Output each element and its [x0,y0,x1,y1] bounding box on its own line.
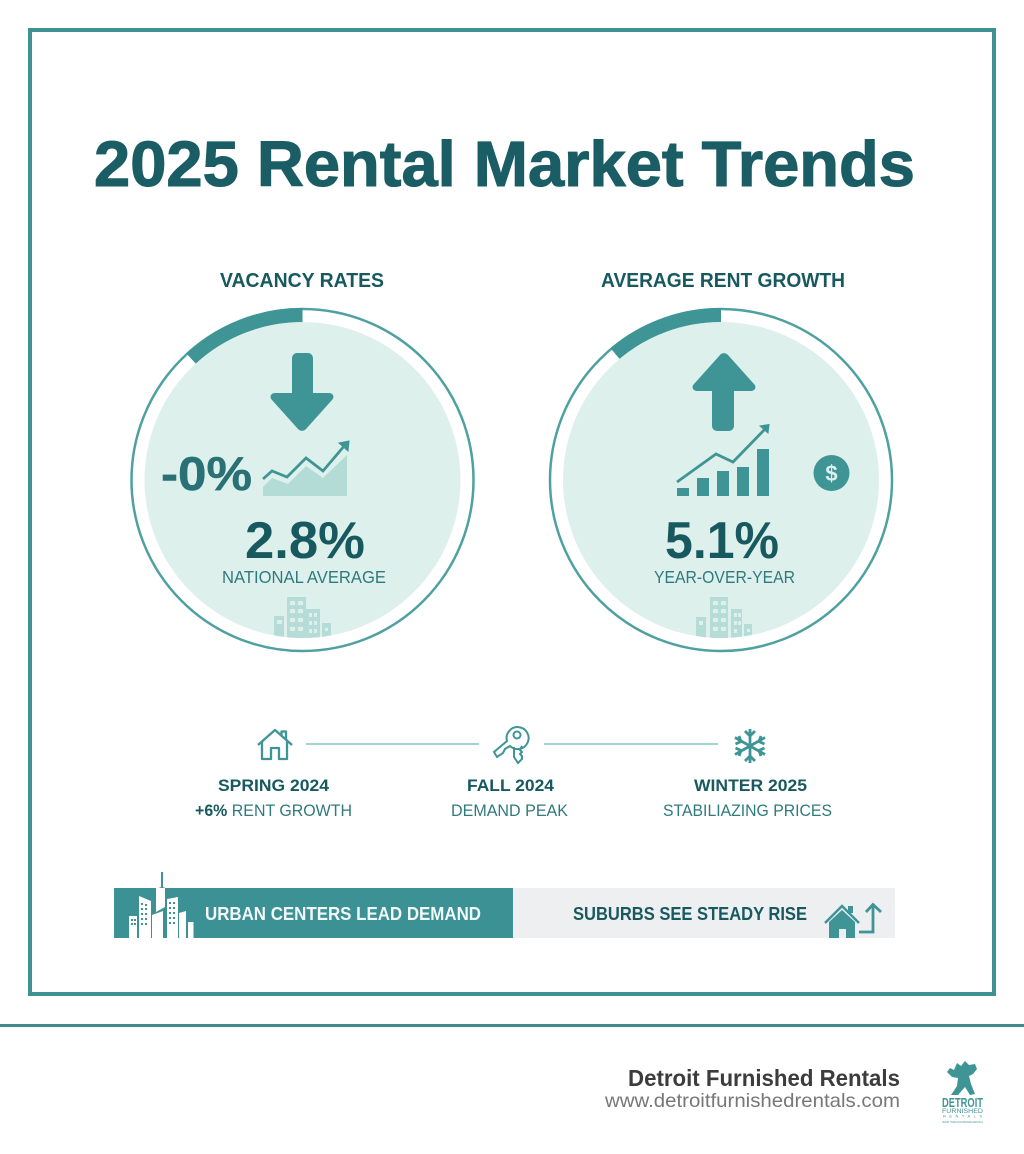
milestone: fall 2024: DEMAND PEAK [451,802,568,820]
panel: vacancy rates [132,270,474,651]
metric value: 5.1% [665,512,779,570]
icon: city skyline [129,872,194,938]
timeline connector left [306,743,479,745]
icon: area trend chart [263,441,349,496]
icon: faded buildings [274,597,331,640]
icon: house outline [258,730,292,759]
banner segment: suburbs [513,888,895,938]
icon: snowflake [735,729,765,763]
heading: average rent growth: AVERAGE RENT GROWTH [601,270,845,292]
metric caption: NATIONAL AVERAGE [222,567,386,587]
banner: urban vs suburbs [114,872,895,938]
logo figure [947,1061,977,1095]
footer url: www.detroitfurnishedrentals.com [604,1090,900,1112]
banner text: suburbs: SUBURBS SEE STEADY RISE [573,904,807,924]
banner text: urban: URBAN CENTERS LEAD DEMAND [205,904,481,924]
gauge ring [132,309,474,651]
milestone: spring 2024: SPRING 2024 [218,777,330,795]
milestone: winter 2025 [663,777,832,820]
timeline [195,727,832,820]
icon: down arrow [271,353,333,431]
icon: faded buildings [696,597,752,640]
outer frame [30,30,994,994]
footer brand name: Detroit Furnished Rentals [628,1065,900,1091]
gauge ring [550,309,892,651]
icon: bar trend chart [677,424,769,496]
milestone: fall 2024: FALL 2024 [467,777,555,795]
change value: -0% [161,447,252,500]
icon: dollar coin: $ [825,461,838,486]
milestone: winter 2025: STABILIAZING PRICES [663,802,832,820]
title: 2025 Rental Market Trends [94,128,915,200]
metric caption: YEAR-OVER-YEAR [654,567,795,587]
logo rentals: RENTALS [943,1114,982,1118]
logo tagline: SHORT TERM AND MIDTERM RENTALS [942,1120,983,1124]
milestone: winter 2025: WINTER 2025 [694,777,807,795]
metric value: 2.8% [245,512,365,570]
panel: average rent growth [550,270,892,651]
timeline connector right [544,743,718,745]
icon: dollar coin [814,455,850,491]
icon: up arrow [693,353,755,431]
icon: house with rising arrow [825,904,881,938]
heading: vacancy rates: VACANCY RATES [220,270,384,292]
milestone: spring 2024: +6% RENT GROWTH [195,802,352,820]
logo wordmark: DETROIT [942,1095,983,1110]
milestone: spring 2024 [195,777,352,820]
milestone: fall 2024 [451,777,568,820]
footer rule [0,1024,1024,1027]
logo [942,1061,983,1124]
banner segment: urban [114,888,513,938]
icon: key [494,727,529,763]
logo subtitle: FURNISHED [942,1108,983,1115]
